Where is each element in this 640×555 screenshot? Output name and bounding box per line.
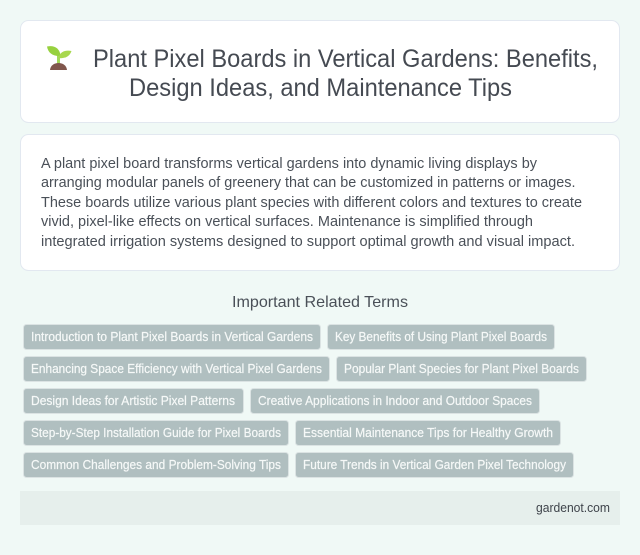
tag list: Future Trends in Vertical Garden Pixel Technology [303,458,567,472]
title: Design Ideas, and Maintenance Tips [129,74,512,102]
tag list [24,324,586,478]
panel: description card [20,134,620,270]
tag list: Enhancing Space Efficiency with Vertical Pixel Gardens [31,362,322,376]
tag list: Introduction to Plant Pixel Boards in Vertical Gardens [31,330,313,344]
description text: These boards utilize various plant species with different colors and textures to create [41,195,582,211]
tag list: Essential Maintenance Tips for Healthy Growth [303,426,553,440]
icon: seedling [47,46,72,70]
description text: vivid, pixel-like effects on vertical surfaces. Maintenance is simplified through [41,214,533,230]
footer source: gardenot.com [536,501,610,515]
tag list: Common Challenges and Problem-Solving Tips [31,458,281,472]
tag list: Design Ideas for Artistic Pixel Patterns [31,394,235,408]
tag list: Popular Plant Species for Plant Pixel Boards [344,362,579,376]
tag list: Key Benefits of Using Plant Pixel Boards [335,330,547,344]
description text: integrated irrigation systems designed to support optimal growth and visual impact. [41,234,575,250]
heading: related terms: Important Related Terms [232,294,408,311]
panel: title card [20,20,620,122]
title: Plant Pixel Boards in Vertical Gardens: Benefits, [93,45,598,73]
title [93,45,598,102]
tag list: Step-by-Step Installation Guide for Pixel Boards [31,426,281,440]
tag list: Creative Applications in Indoor and Outdoor Spaces [258,394,532,408]
footer bar [20,491,620,525]
description text [41,156,582,250]
description text: arranging modular panels of greenery that can be customized in patterns or images. [41,175,576,191]
description text: A plant pixel board transforms vertical gardens into dynamic living displays by [41,156,538,172]
